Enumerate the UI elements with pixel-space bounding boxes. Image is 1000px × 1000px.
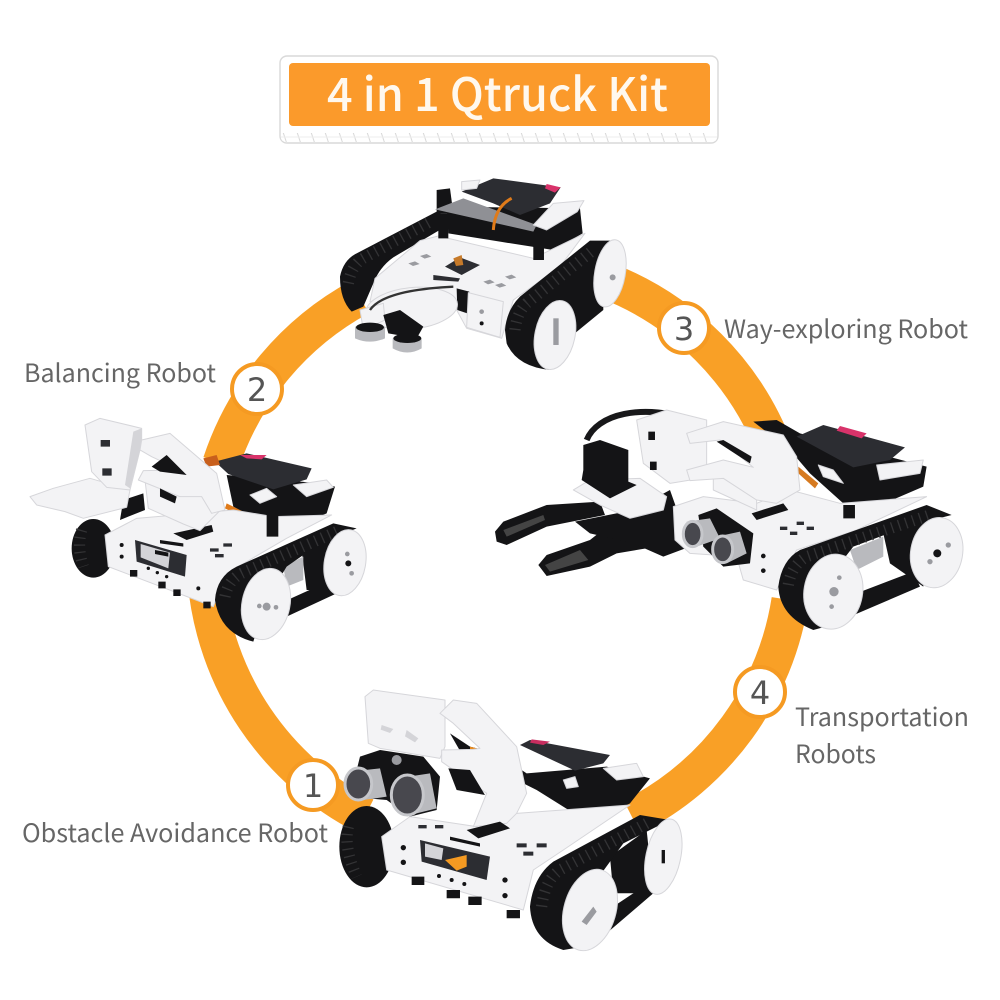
near wheel xyxy=(528,297,582,373)
gripper block xyxy=(575,490,690,557)
electronics xyxy=(450,733,650,823)
step badge 2: 2 xyxy=(247,371,267,409)
electronics xyxy=(227,475,335,533)
label: transportation robots: Transportation xyxy=(795,698,969,734)
ultrasonic sensor xyxy=(350,750,440,817)
base plate xyxy=(382,805,630,910)
near wheel xyxy=(798,549,869,634)
base plate xyxy=(673,490,927,590)
cable xyxy=(587,412,698,440)
base plate xyxy=(370,233,585,338)
step badge 4: 4 xyxy=(750,674,770,712)
near track xyxy=(215,523,357,642)
ultrasonic sensor xyxy=(364,283,460,334)
step badge 3 xyxy=(659,303,709,353)
motor xyxy=(283,557,303,587)
label: obstacle avoidance robot: Obstacle Avoidance Robot xyxy=(22,814,329,850)
step badge 1: 1 xyxy=(303,767,323,805)
robot: balancing (left) xyxy=(30,418,371,644)
label: transportation robots: Robots xyxy=(795,735,876,771)
servo xyxy=(582,440,637,498)
gripper plate xyxy=(573,478,667,518)
gripper fingers xyxy=(495,502,605,545)
far wheel white xyxy=(319,526,371,599)
electronics xyxy=(753,420,927,517)
arm xyxy=(440,700,527,827)
base plate xyxy=(105,510,332,607)
step badge 4 xyxy=(735,667,785,717)
far wheel xyxy=(905,513,968,592)
robot: obstacle avoidance (bottom) xyxy=(339,690,688,957)
electronics stack xyxy=(447,207,583,250)
near wheel xyxy=(553,863,626,957)
label: balancing robot: Balancing Robot xyxy=(24,354,217,390)
lower track run xyxy=(603,883,653,933)
title banner xyxy=(280,56,718,143)
far wheel white xyxy=(638,816,688,898)
motor xyxy=(850,537,883,570)
lower track run xyxy=(843,572,920,617)
left track xyxy=(340,212,457,312)
lower track run xyxy=(567,257,603,340)
step badge 2 xyxy=(232,364,282,414)
near track xyxy=(530,815,670,950)
far wheel xyxy=(589,237,631,309)
title text: 4 in 1 Qtruck Kit xyxy=(327,59,668,125)
near track xyxy=(778,505,952,630)
step badge 3: 3 xyxy=(674,310,694,348)
orange ring xyxy=(206,280,790,817)
lower track run xyxy=(280,580,337,617)
far wheel xyxy=(72,519,115,578)
arm xyxy=(145,480,224,531)
robot: way-exploring with gripper (right) xyxy=(495,410,968,634)
gripper plate xyxy=(30,478,130,518)
bracket xyxy=(637,410,707,483)
near track xyxy=(505,241,622,370)
far wheel xyxy=(339,806,394,887)
ultrasonic sensor xyxy=(698,508,753,567)
label: transportation robots xyxy=(795,698,969,771)
bracket xyxy=(365,690,445,758)
label: way-exploring robot: Way-exploring Robot xyxy=(724,310,969,346)
far tread xyxy=(883,513,930,587)
arm xyxy=(713,472,757,510)
near wheel xyxy=(235,564,297,644)
robot: way-exploring (top) xyxy=(340,178,631,373)
bracket xyxy=(85,418,142,490)
step badge 1 xyxy=(288,760,338,810)
